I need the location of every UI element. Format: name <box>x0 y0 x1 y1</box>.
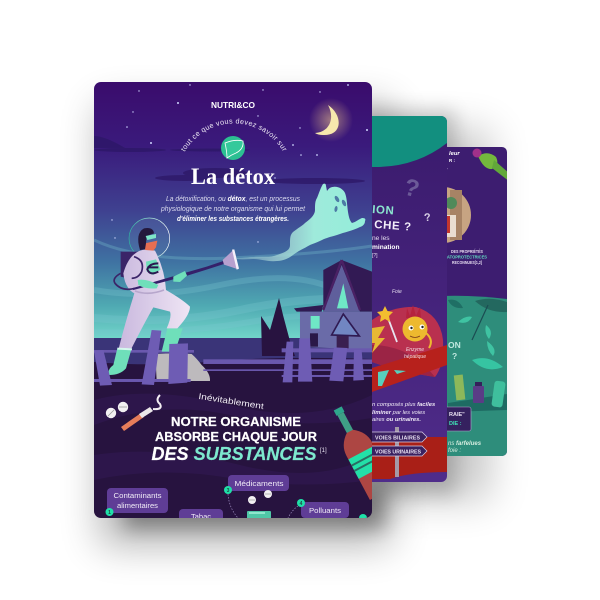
icon: pills centre <box>248 490 272 504</box>
bubble: contaminants alimentaires: Contaminants <box>114 493 162 500</box>
bubble: tabac: Tabac <box>191 512 211 521</box>
number badge 1 <box>106 508 114 516</box>
text: elimination routes <box>372 402 435 421</box>
rear boot and leg <box>162 328 183 352</box>
question marks: ? <box>401 174 422 204</box>
panel: front card (la détox) <box>94 82 372 518</box>
drop shadows <box>100 105 490 545</box>
heading fragment: ION <box>372 204 395 218</box>
banner: dark label: RAIE" <box>449 412 465 418</box>
illustration: fence boards <box>94 330 364 386</box>
illustration: artichoke flower <box>472 148 507 180</box>
stars <box>111 84 368 243</box>
red bottom area <box>372 437 447 479</box>
banner: dark label <box>447 406 472 432</box>
number badge 3 <box>224 486 232 494</box>
gloves <box>138 280 158 289</box>
text: card three intro: leur <box>449 151 460 157</box>
illustration: haunted house <box>294 260 372 350</box>
number badge 4: 4 <box>300 501 303 507</box>
number badge 1: 1 <box>108 510 111 516</box>
bubble: contaminants alimentaires <box>107 488 168 513</box>
connector dotted lines <box>228 494 298 518</box>
intro paragraph: La détoxification, ou détox, est un processus <box>166 196 300 203</box>
question marks <box>406 179 430 221</box>
bubble: polluants <box>301 502 349 518</box>
panel: second card (elimination) <box>372 116 447 482</box>
curved heading: artichaut: HAUT <box>447 168 448 170</box>
illustration: liver <box>372 307 447 392</box>
illustration: astronaut ghost hunter <box>109 218 239 375</box>
label: foie: Foie <box>392 289 402 295</box>
bubble: médicaments: Médicaments <box>234 479 284 488</box>
text: elimination fragment <box>372 235 399 259</box>
signpost <box>372 427 428 477</box>
heading fragment: CHE ? <box>374 219 412 234</box>
curved subtitle: tout ce que vous devez savoir sur <box>181 118 286 152</box>
distant clouds <box>94 136 365 184</box>
bubble: médicaments <box>228 475 289 491</box>
intro paragraph: d'éliminer les substances étrangères. <box>177 216 289 223</box>
label: enzyme hépatique: hépatique <box>404 354 426 360</box>
illustration: artichoke photo circle <box>447 187 471 243</box>
belt <box>135 290 164 293</box>
heading: notre organisme <box>152 415 317 464</box>
footnote marker: [1] <box>320 448 327 454</box>
front boot <box>109 348 132 375</box>
illustration: ghost <box>237 184 365 261</box>
teal lower section <box>447 296 507 456</box>
wavy bands in dark section <box>94 394 372 485</box>
illustration: rock <box>155 353 210 381</box>
suit body <box>118 249 190 350</box>
heading: notre organisme: DES SUBSTANCES <box>152 444 316 464</box>
icon: star wand <box>377 306 397 342</box>
ground blue band <box>94 338 372 364</box>
hair <box>138 228 154 250</box>
text: card three intro <box>449 151 460 162</box>
heading fragment <box>372 205 410 230</box>
signpost: VOIES BILIAIRES <box>375 436 420 442</box>
text: elimination routes: aires ou urinaires. <box>372 417 421 423</box>
bubble: contaminants alimentaires: alimentaires <box>117 503 159 510</box>
moon <box>311 100 351 140</box>
sky background <box>94 82 372 339</box>
icon: liver <box>221 136 245 160</box>
neck and face <box>145 241 157 251</box>
ghost vacuum <box>132 261 224 290</box>
text: elimination fragment: mination <box>372 244 399 251</box>
sky swooshes <box>94 238 372 320</box>
hose <box>114 257 142 289</box>
caption: inévitablement: Inévitablement <box>198 391 265 411</box>
illustration: green leaves <box>448 299 507 369</box>
helmet ring <box>129 218 170 259</box>
text: folk remedies: foie : <box>448 448 461 454</box>
character: enzyme <box>402 305 431 348</box>
label: enzyme hépatique <box>404 347 426 360</box>
banner: dark label: DIE : <box>449 421 462 427</box>
icon: pills <box>106 402 128 418</box>
number badge 3: 3 <box>227 488 230 494</box>
illustration: supplement products <box>448 375 507 412</box>
brand: NUTRI&CO: NUTRI&CO <box>211 100 255 110</box>
suit emblem <box>146 259 161 275</box>
text: folk remedies <box>448 440 481 452</box>
intro paragraph <box>160 196 306 223</box>
text: hepatoprotective properties <box>447 248 487 265</box>
question marks: ? <box>423 211 432 224</box>
infographic mockup: three stacked cards <box>77 82 510 568</box>
intro paragraph: physiologique de notre organisme qui lui permet <box>160 206 306 213</box>
title: La détox <box>191 164 275 189</box>
text: elimination routes: liminer par les voies <box>372 410 425 416</box>
bubble: polluants: Polluants <box>309 506 341 515</box>
signpost: VOIES URINAIRES <box>375 450 421 456</box>
backpack <box>121 252 142 282</box>
bubble: tabac <box>179 509 223 525</box>
text: elimination fragment: ne les <box>372 235 390 242</box>
teal top band <box>372 116 447 167</box>
text: card three intro: R : <box>449 158 456 163</box>
illustration: fence rails <box>94 348 373 382</box>
text: hepatoprotective properties: HÉPATOPROTECTRICES <box>439 252 487 260</box>
text: hepatoprotective properties: RECONNUES[1,2] <box>452 260 482 265</box>
number badge 4 <box>297 499 305 507</box>
text: hepatoprotective properties: DES PROPRIÉTÉS <box>451 247 483 254</box>
dark lower ground <box>94 338 372 518</box>
icon: wine bottle <box>325 402 396 500</box>
label: enzyme hépatique: Enzyme <box>406 347 424 353</box>
heading: notre organisme: ABSORBE CHAQUE JOUR <box>155 430 317 444</box>
heading: notre organisme: NOTRE ORGANISME <box>171 415 301 429</box>
text: folk remedies: ns farfelues <box>448 441 482 447</box>
panel: third card (artichoke) <box>447 147 507 456</box>
text: elimination routes: n composés plus faciles <box>372 402 436 408</box>
text: elimination fragment: [?] <box>372 253 378 259</box>
number badge 5 <box>359 514 367 522</box>
partial heading: question on green: ON <box>448 340 461 350</box>
illustration: dead tree <box>261 298 295 356</box>
icon: lightning <box>372 326 385 353</box>
icon: green jar <box>247 511 271 519</box>
icon: cigarette <box>121 395 161 431</box>
question mark: ? <box>452 351 457 361</box>
visor <box>146 234 156 240</box>
